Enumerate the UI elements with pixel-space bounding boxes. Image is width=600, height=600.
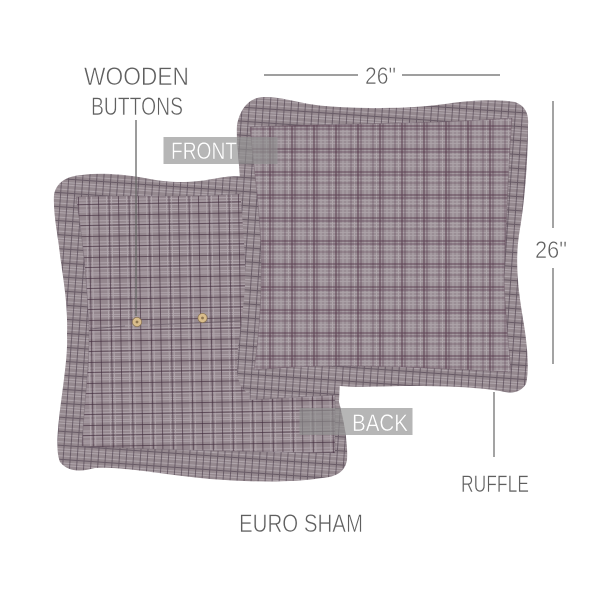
label: back tag [300,408,412,437]
front pillow sham [237,97,528,393]
callout: wooden buttons [84,63,189,316]
back pillow sham [54,174,347,482]
back ruffle [54,174,347,482]
product name: EURO SHAM [239,510,363,538]
button flap seam [90,321,240,329]
label: front tag [164,137,278,165]
back panel [76,193,335,453]
callout: ruffle: RUFFLE [461,471,529,498]
label: front tag: FRONT [171,138,237,165]
front panel [250,118,512,372]
callout: wooden buttons: WOODEN [84,63,189,91]
callout: wooden buttons: BUTTONS [91,93,183,121]
dimension: height 26 inches: 26" [535,237,567,264]
button: left [132,317,142,327]
label: back tag: BACK [352,410,408,437]
dimension: width 26 inches: 26" [365,63,396,90]
front ruffle [237,97,528,393]
button: right [198,313,207,323]
callout: ruffle [461,392,529,498]
